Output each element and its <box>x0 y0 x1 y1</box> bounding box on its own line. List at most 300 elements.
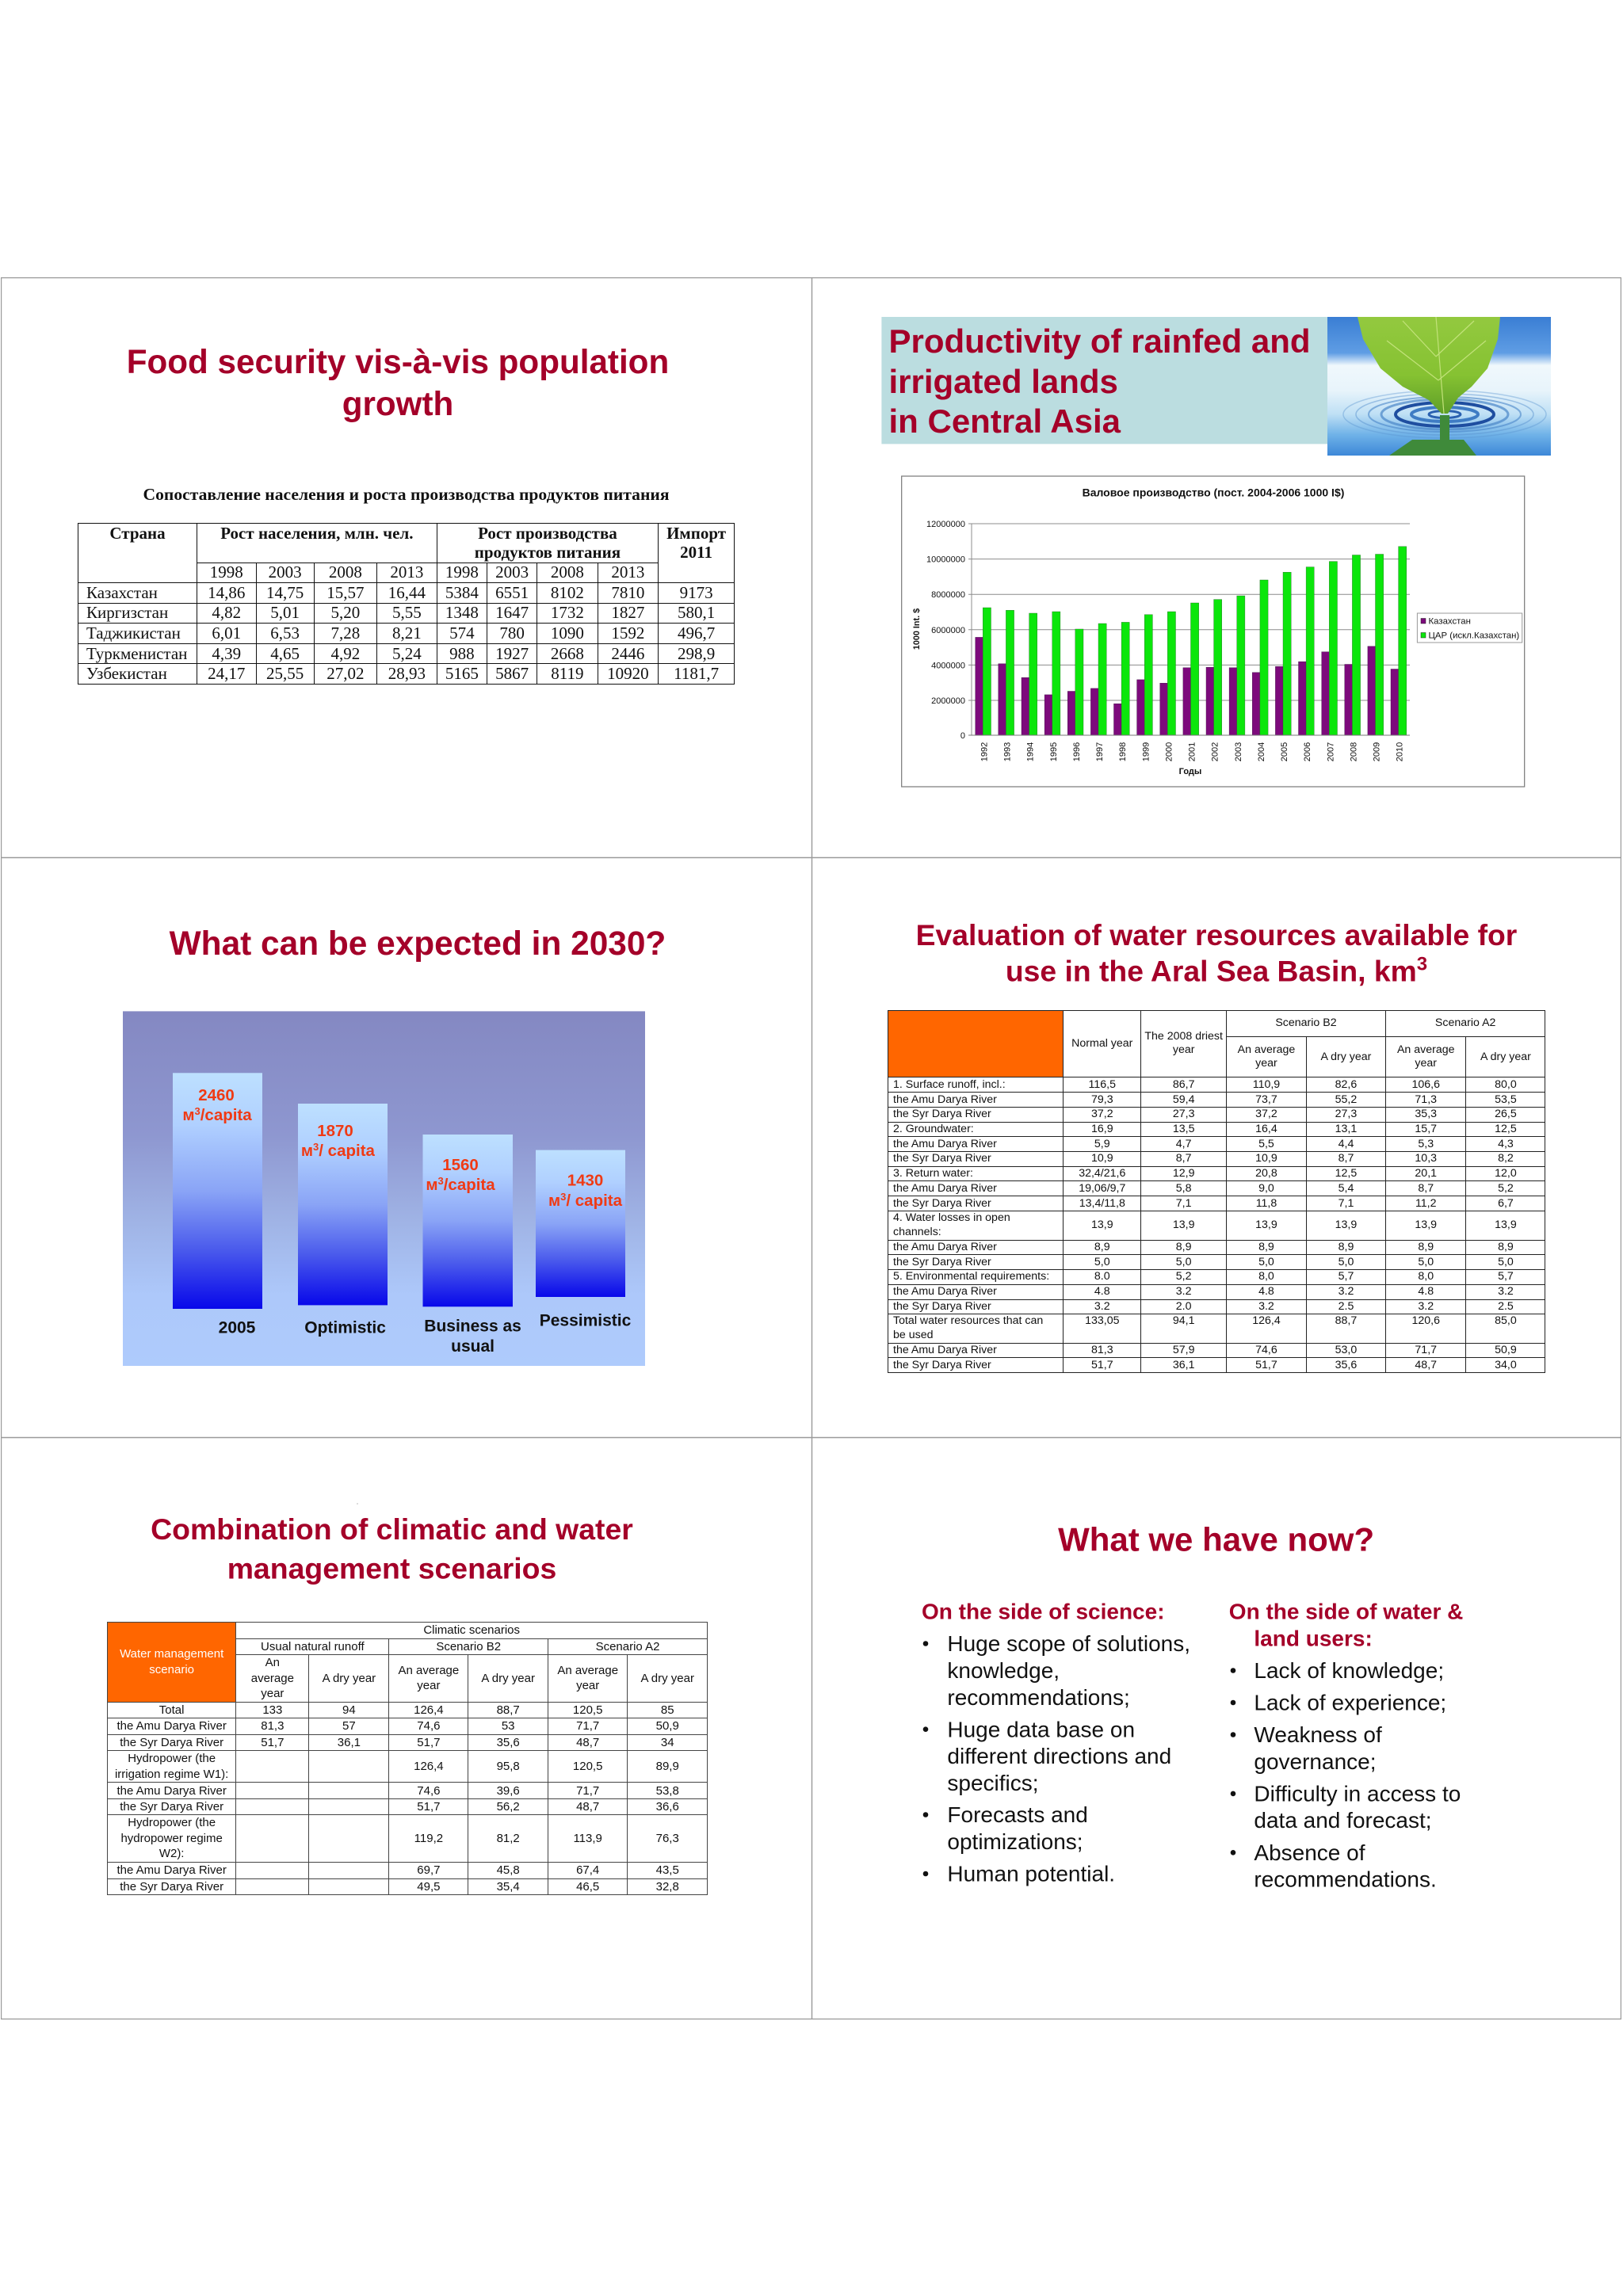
table: climatic and water management scenarios: 45,8 <box>497 1863 520 1877</box>
table: water resources by scenario: 4,4 <box>1338 1138 1354 1150</box>
table: water resources by scenario: 5,5 <box>1258 1138 1274 1150</box>
bar: 2005: 3 <box>194 1105 200 1117</box>
table: water resources by scenario: the Amu Darya River <box>893 1138 997 1150</box>
table: population and food production growth: 14,75 <box>266 583 304 602</box>
table: population and food production growth: 15,57 <box>327 583 364 602</box>
table: water resources by scenario: 1. Surface runoff, incl.: <box>893 1078 1006 1091</box>
table: population and food production growth: 5384 <box>445 583 479 602</box>
table: water resources by scenario: the Amu Darya River <box>893 1344 997 1356</box>
table: water resources by scenario: 11,2 <box>1415 1196 1437 1209</box>
table: population and food production growth: Страна <box>109 524 166 543</box>
title: What we have now? <box>1058 1521 1374 1558</box>
table: climatic and water management scenarios: Water management <box>120 1647 223 1661</box>
table: climatic and water management scenarios: the Amu Darya River <box>116 1863 227 1877</box>
table: water resources by scenario: 11,8 <box>1256 1196 1277 1209</box>
table: climatic and water management scenarios: A dry year <box>323 1672 376 1685</box>
table: water resources by scenario: 80,0 <box>1495 1078 1517 1091</box>
table: water resources by scenario: Total water resources that can <box>893 1314 1043 1327</box>
slide artwork: 2030 water availability chart <box>123 925 666 1366</box>
table: water resources by scenario: 82,6 <box>1335 1078 1357 1091</box>
table: climatic and water management scenarios: 85 <box>661 1703 674 1717</box>
table: population and food production growth: 7810 <box>611 583 644 602</box>
bar: optimistic: 3 <box>313 1141 319 1153</box>
table: climatic and water management scenarios: 53,8 <box>656 1784 679 1798</box>
table: climatic and water management scenarios: year <box>417 1679 440 1692</box>
table: water resources by scenario: 8,0 <box>1418 1270 1434 1283</box>
table: water resources by scenario: 8,7 <box>1176 1152 1192 1165</box>
table: climatic and water management scenarios: 119,2 <box>414 1832 443 1845</box>
table: population and food production growth: 5,01 <box>270 603 300 622</box>
table: population and food production growth: Рост производства <box>478 524 617 543</box>
table: climatic and water management scenarios: A dry year <box>481 1672 535 1685</box>
table: climatic and water management scenarios: 71,7 <box>576 1719 599 1733</box>
table: water resources by scenario: 86,7 <box>1173 1078 1194 1091</box>
table: water resources by scenario: 13,9 <box>1495 1219 1517 1231</box>
table: population and food production growth: Киргизстан <box>86 603 168 622</box>
table: water resources by scenario: An average <box>1397 1043 1455 1056</box>
table: population and food production growth: 8102 <box>551 583 584 602</box>
table: population and food production growth: 5,55 <box>392 603 422 622</box>
table: water resources by scenario: 8,9 <box>1338 1241 1354 1253</box>
bar: pessimistic: 3 <box>560 1191 566 1203</box>
table: climatic and water management scenarios: Hydropower (the <box>128 1752 216 1765</box>
table: water resources by scenario: year <box>1173 1043 1194 1056</box>
table: climatic and water management scenarios: 53 <box>502 1719 515 1733</box>
title: evaluation of water resources: Evaluation of water resources available for <box>916 918 1517 952</box>
table: population and food production growth: 6,01 <box>212 624 241 643</box>
column: on the side of science: Huge scope of solutions, <box>947 1631 1190 1656</box>
table: water resources by scenario: 94,1 <box>1173 1314 1194 1327</box>
table: climatic and water management scenarios: scenario <box>149 1663 194 1676</box>
y axis labels: 10000000 <box>926 555 965 565</box>
x axis year labels: 1996 <box>1072 742 1082 761</box>
table: water resources by scenario: 9,0 <box>1258 1182 1274 1195</box>
chart legend <box>1417 613 1522 643</box>
table: water resources by scenario: 10,9 <box>1255 1152 1277 1165</box>
table: climatic and water management scenarios: 94 <box>342 1703 356 1717</box>
bar: pessimistic: м <box>548 1192 560 1210</box>
y axis labels: 6000000 <box>931 626 965 635</box>
column: on the side of water and land users: recommendations. <box>1254 1867 1437 1892</box>
chart legend: Казахстан <box>1428 616 1471 626</box>
bar: optimistic: / capita <box>319 1142 376 1160</box>
table: population and food production growth: 14,86 <box>208 583 245 602</box>
scenario labels <box>219 1312 632 1356</box>
table: water resources by scenario: the Syr Darya River <box>893 1152 991 1165</box>
table: water resources by scenario: 4.8 <box>1258 1285 1274 1298</box>
table: population and food production growth: 580,1 <box>678 603 715 622</box>
title: combination of climatic and water management scenarios <box>151 1504 633 1585</box>
table: climatic and water management scenarios: the Syr Darya River <box>120 1880 223 1894</box>
table: climatic and water management scenarios: 36,6 <box>656 1800 679 1814</box>
table: water resources by scenario: the Syr Darya River <box>893 1256 991 1268</box>
table: water resources by scenario: 5,7 <box>1338 1270 1354 1283</box>
x axis year labels: 2006 <box>1303 742 1312 761</box>
table: climatic and water management scenarios: Climatic scenarios <box>423 1623 520 1637</box>
y axis labels: 0 <box>960 731 965 741</box>
table: population and food production growth: 298,9 <box>678 644 715 663</box>
banner title: Productivity of rainfed and <box>889 322 1311 360</box>
table: water resources by scenario: 12,5 <box>1335 1167 1357 1180</box>
column: on the side of science: On the side of science: <box>922 1600 1165 1624</box>
table: population and food production growth: 2003 <box>495 563 529 582</box>
y axis labels: 8000000 <box>931 590 965 600</box>
column: on the side of water and land users: Difficulty in access to <box>1254 1781 1461 1806</box>
table: water resources by scenario: 48,7 <box>1415 1359 1437 1371</box>
bar: pessimistic: 1430 <box>567 1171 603 1190</box>
table: population and food production growth: 5,24 <box>392 644 422 663</box>
table: population and food production growth: 1827 <box>611 603 644 622</box>
table: population and food production growth: 1998 <box>445 563 479 582</box>
table: population and food production growth: 1998 <box>210 563 243 582</box>
table: population and food production growth: 27,02 <box>327 664 364 683</box>
table: water resources by scenario: 20,1 <box>1415 1167 1437 1180</box>
scenario labels: Optimistic <box>304 1318 386 1337</box>
table: water resources by scenario: 35,6 <box>1335 1359 1357 1371</box>
table: population and food production growth: 4,39 <box>212 644 241 663</box>
table: water resources by scenario: 27,3 <box>1173 1108 1194 1120</box>
table: water resources by scenario: Scenario A2 <box>1435 1016 1495 1029</box>
table: population and food production growth: 28,93 <box>388 664 426 683</box>
series: Kazakhstan bars <box>976 637 1399 735</box>
bar: 2005: м <box>182 1106 194 1124</box>
table: climatic and water management scenarios: 76,3 <box>656 1832 679 1845</box>
table: water resources by scenario: A dry year <box>1321 1051 1371 1063</box>
table: water resources by scenario: 8,0 <box>1258 1270 1274 1283</box>
bar: optimistic: 1870 <box>317 1122 353 1140</box>
table: water resources by scenario: 53,0 <box>1335 1344 1357 1356</box>
table: population and food production growth <box>78 523 735 685</box>
table: climatic and water management scenarios: 120,5 <box>573 1760 602 1773</box>
table: water resources by scenario: the Amu Darya River <box>893 1093 997 1106</box>
title: food security vis-a-vis population growth: growth <box>342 385 453 422</box>
column: on the side of science: knowledge, <box>947 1658 1060 1683</box>
table: water resources by scenario: 6,7 <box>1498 1196 1514 1209</box>
table: population and food production growth: 2003 <box>269 563 302 582</box>
table: water resources by scenario: 8,9 <box>1094 1241 1110 1253</box>
table: water resources by scenario: 71,7 <box>1415 1344 1437 1356</box>
table: climatic and water management scenarios: 126,4 <box>414 1703 444 1717</box>
table: water resources by scenario: 7,1 <box>1176 1196 1192 1209</box>
table: water resources by scenario: 8,9 <box>1418 1241 1434 1253</box>
table: water resources by scenario: 5,9 <box>1094 1138 1110 1150</box>
table: climatic and water management scenarios: 46,5 <box>576 1880 599 1894</box>
bar: optimistic: м <box>301 1142 313 1160</box>
column: on the side of science: recommendations; <box>947 1685 1130 1710</box>
bar: pessimistic: / capita <box>566 1192 623 1210</box>
x axis year labels: 2009 <box>1373 742 1382 761</box>
table: water resources by scenario: 36,1 <box>1173 1359 1194 1371</box>
table: climatic and water management scenarios: 34 <box>661 1736 674 1749</box>
table: population and food production growth: 4,92 <box>330 644 360 663</box>
column: on the side of science: Huge data base on <box>947 1717 1135 1741</box>
table: water resources by scenario: 7,1 <box>1338 1196 1354 1209</box>
x axis year labels: 1998 <box>1118 742 1128 761</box>
y axis labels: 12000000 <box>926 520 965 529</box>
table: climatic and water management scenarios: 113,9 <box>573 1832 602 1845</box>
table: water resources by scenario: 5,0 <box>1094 1256 1110 1268</box>
table: climatic and water management scenarios: 57 <box>342 1719 356 1733</box>
table: water resources by scenario: 5,2 <box>1498 1182 1514 1195</box>
column: on the side of water and land users: Absence of <box>1254 1840 1365 1865</box>
table: water resources by scenario: 13,4/11,8 <box>1079 1196 1125 1209</box>
table: water resources by scenario: 120,6 <box>1411 1314 1440 1327</box>
table: water resources by scenario: the Amu Darya River <box>893 1285 997 1298</box>
table: climatic and water management scenarios: W2): <box>159 1847 184 1860</box>
table: population and food production growth: 5,20 <box>330 603 360 622</box>
table: population and food production growth: 988 <box>449 644 475 663</box>
scenario labels: 2005 <box>219 1318 256 1337</box>
bar: business as usual <box>423 1135 513 1306</box>
panel: combination of scenarios slide <box>1 1437 812 2019</box>
table: water resources by scenario: 116,5 <box>1089 1078 1116 1091</box>
table: water resources by scenario: The 2008 driest <box>1144 1030 1223 1043</box>
y axis labels <box>926 520 965 741</box>
table: water resources by scenario: 4.8 <box>1418 1285 1434 1298</box>
table: water resources by scenario: 10,3 <box>1415 1152 1437 1165</box>
bar: pessimistic <box>536 1150 625 1297</box>
table: water resources by scenario: 3.2 <box>1338 1285 1354 1298</box>
table: water resources by scenario: 37,2 <box>1091 1108 1113 1120</box>
y axis labels: 4000000 <box>931 661 965 670</box>
table: population and food production growth: 5165 <box>445 664 479 683</box>
title: What can be expected in 2030? <box>170 925 666 962</box>
table: climatic and water management scenarios: 48,7 <box>576 1736 599 1749</box>
table: water resources by scenario: 5,0 <box>1176 1256 1192 1268</box>
table: water resources by scenario: 13,5 <box>1173 1123 1194 1135</box>
table: climatic and water management scenarios: Hydropower (the <box>128 1816 216 1829</box>
table: water resources by scenario: 8.0 <box>1094 1270 1110 1283</box>
x axis year labels: 2004 <box>1257 742 1266 761</box>
table: climatic and water management scenarios: year <box>576 1679 599 1692</box>
bar: optimistic <box>298 1104 388 1305</box>
table: climatic and water management scenarios: 88,7 <box>497 1703 520 1717</box>
table: population and food production growth: 4,82 <box>212 603 241 622</box>
table: population and food production growth: 2011 <box>680 543 712 562</box>
table: climatic and water management scenarios: An average <box>399 1664 459 1677</box>
panel: productivity slide <box>812 277 1621 858</box>
x axis year labels: 2007 <box>1326 742 1335 761</box>
table: water resources by scenario: 15,7 <box>1415 1123 1437 1135</box>
title: food security vis-a-vis population growth <box>127 343 670 504</box>
table: climatic and water management scenarios: 81,2 <box>497 1832 520 1845</box>
table: climatic and water management scenarios: 67,4 <box>576 1863 599 1877</box>
title: evaluation of water resources: use in the Aral Sea Basin, km <box>1006 955 1417 988</box>
table: water resources by scenario: 3.2 <box>1176 1285 1192 1298</box>
table: water resources by scenario: 5. Environmental requirements: <box>893 1270 1049 1283</box>
x axis year labels: 2000 <box>1164 742 1174 761</box>
scenario labels: usual <box>451 1337 495 1356</box>
table: water resources by scenario: 2.5 <box>1498 1300 1514 1313</box>
bar: 2005: 2460 <box>198 1086 235 1104</box>
table: water resources by scenario: 53,5 <box>1495 1093 1517 1106</box>
table: water resources by scenario: 16,9 <box>1091 1123 1113 1135</box>
table: climatic and water management scenarios: 133 <box>262 1703 282 1717</box>
table: water resources by scenario: the Syr Darya River <box>893 1108 991 1120</box>
table: water resources by scenario: 3.2 <box>1498 1285 1514 1298</box>
table: water resources by scenario: 10,9 <box>1091 1152 1113 1165</box>
table: water resources by scenario: 3. Return water: <box>893 1167 973 1180</box>
table: population and food production growth: 25,55 <box>266 664 304 683</box>
table: climatic and water management scenarios: Total <box>159 1703 184 1717</box>
table: water resources by scenario: 26,5 <box>1495 1108 1517 1120</box>
table: water resources by scenario: 16,4 <box>1255 1123 1277 1135</box>
title: combination of climatic and water management scenarios: management scenarios <box>227 1552 556 1585</box>
table: population and food production growth: 8119 <box>551 664 584 683</box>
series: Central Asia excl. Kazakhstan bars <box>983 547 1407 735</box>
table: water resources by scenario: 4.8 <box>1094 1285 1110 1298</box>
table: population and food production growth: 1927 <box>495 644 529 663</box>
icon: leaf over water photo <box>1327 317 1551 456</box>
table: population and food production growth: 2008 <box>329 563 362 582</box>
bar: business as usual: 3 <box>437 1175 444 1187</box>
table: water resources by scenario: year <box>1415 1057 1437 1070</box>
table: climatic and water management scenarios: 74,6 <box>417 1784 440 1798</box>
slide text: title and two bullet columns <box>922 1521 1463 1892</box>
x axis year labels: 2008 <box>1349 742 1358 761</box>
table: water resources by scenario: 3.2 <box>1094 1300 1110 1313</box>
table: water resources by scenario: 50,9 <box>1495 1344 1517 1356</box>
x axis year labels: 1994 <box>1026 742 1036 761</box>
table: population and food production growth: 5867 <box>495 664 529 683</box>
table: climatic and water management scenarios: the Syr Darya River <box>120 1800 223 1814</box>
table: water resources by scenario: 8,7 <box>1418 1182 1434 1195</box>
table: water resources by scenario: 8,9 <box>1498 1241 1514 1253</box>
table: population and food production growth: Таджикистан <box>86 624 181 643</box>
table: climatic and water management scenarios: 35,6 <box>497 1736 520 1749</box>
bar: business as usual: /capita <box>444 1176 495 1194</box>
table: water resources by scenario: 5,2 <box>1176 1270 1192 1283</box>
table: climatic and water management scenarios: 48,7 <box>576 1800 599 1814</box>
title: combination of climatic and water management scenarios: Combination of climatic and water <box>151 1512 633 1546</box>
column: on the side of water and land users: On the side of water & <box>1229 1600 1463 1624</box>
table: population and food production growth: 780 <box>499 624 525 643</box>
table: climatic and water management scenarios: 32,8 <box>656 1880 679 1894</box>
column: on the side of water and land users: Weakness of <box>1254 1722 1382 1747</box>
chart background <box>123 1011 645 1366</box>
table: water resources by scenario: 13,9 <box>1335 1219 1357 1231</box>
table: climatic and water management scenarios: 126,4 <box>414 1760 444 1773</box>
bar: business as usual: м <box>426 1176 437 1194</box>
table: climatic and water management scenarios: 43,5 <box>656 1863 679 1877</box>
table: climatic and water management scenarios: 69,7 <box>417 1863 440 1877</box>
table: water resources by scenario: 106,6 <box>1411 1078 1440 1091</box>
table: water resources by scenario: 55,2 <box>1335 1093 1357 1106</box>
x axis year labels: 2003 <box>1234 742 1243 761</box>
table: climatic and water management scenarios: Usual natural runoff <box>261 1640 365 1653</box>
table: population and food production growth: Казахстан <box>86 583 158 602</box>
table: water resources by scenario: the Syr Darya River <box>893 1300 991 1313</box>
table: climatic and water management scenarios: the Amu Darya River <box>116 1719 227 1733</box>
table: water resources by scenario: be used <box>893 1329 934 1341</box>
table: climatic and water management scenarios: Scenario A2 <box>596 1640 659 1653</box>
table: water resources by scenario: 2.0 <box>1176 1300 1192 1313</box>
table: water resources by scenario: 79,3 <box>1091 1093 1113 1106</box>
table: climatic and water management scenarios: 49,5 <box>417 1880 440 1894</box>
table: water resources by scenario: 13,9 <box>1255 1219 1277 1231</box>
table: water resources by scenario: the Syr Darya River <box>893 1196 991 1209</box>
table: water resources by scenario: 88,7 <box>1335 1314 1357 1327</box>
table: water resources by scenario: 5,0 <box>1338 1256 1354 1268</box>
table: population and food production growth: Туркменистан <box>86 644 187 663</box>
column: on the side of water and land users: governance; <box>1254 1749 1377 1774</box>
table: climatic and water management scenarios: the Syr Darya River <box>120 1736 223 1749</box>
table: population and food production growth: 4,65 <box>270 644 300 663</box>
title: food security vis-a-vis population growth: Food security vis-à-vis population <box>127 343 669 380</box>
x axis year labels: 1992 <box>980 742 989 761</box>
table: population and food production growth: 2013 <box>390 563 423 582</box>
panel: expectations for 2030 slide <box>1 857 812 1438</box>
banner background <box>881 317 1327 444</box>
table: population and food production growth: 1592 <box>611 624 644 643</box>
slide artwork: banner, photo and chart <box>881 317 1551 788</box>
table: water resources by scenario: 5,0 <box>1418 1256 1434 1268</box>
title: evaluation of water resources <box>916 918 1517 988</box>
table: water resources by scenario: 71,3 <box>1415 1093 1437 1106</box>
table: water resources by scenario: 3.2 <box>1258 1300 1274 1313</box>
table: water resources by scenario: 12,5 <box>1495 1123 1517 1135</box>
table: water resources by scenario: channels: <box>893 1226 941 1238</box>
table: population and food production growth: 2668 <box>551 644 584 663</box>
bar: 2005 <box>173 1073 262 1309</box>
table: population and food production growth: 16,44 <box>388 583 426 602</box>
table: climatic and water management scenarios: An average <box>557 1664 618 1677</box>
table: climatic and water management scenarios: 74,6 <box>417 1719 440 1733</box>
banner title <box>889 322 1311 440</box>
table: water resources by scenario: 57,9 <box>1173 1344 1194 1356</box>
x axis year labels: 1993 <box>1003 742 1013 761</box>
x axis year labels: 2001 <box>1188 742 1197 761</box>
table: water resources by scenario: 126,4 <box>1252 1314 1281 1327</box>
table: climatic and water management scenarios: A dry year <box>640 1672 694 1685</box>
x axis year labels: 2005 <box>1280 742 1289 761</box>
table: climatic and water management scenarios: 95,8 <box>497 1760 520 1773</box>
table: water resources by scenario: 74,6 <box>1255 1344 1277 1356</box>
column: on the side of science: different directions and <box>947 1744 1171 1768</box>
table: climatic and water management scenarios: 81,3 <box>261 1719 284 1733</box>
table: population and food production growth: 1348 <box>445 603 479 622</box>
table: water resources by scenario: 8,9 <box>1176 1241 1192 1253</box>
table: water resources by scenario: 13,9 <box>1415 1219 1437 1231</box>
table: water resources by scenario: 4,3 <box>1498 1138 1514 1150</box>
table: population and food production growth: 9173 <box>680 583 713 602</box>
table: water resources by scenario: 3.2 <box>1418 1300 1434 1313</box>
table: water resources by scenario: 5,7 <box>1498 1270 1514 1283</box>
table: water resources by scenario: 4,7 <box>1176 1138 1192 1150</box>
column: on the side of water and land users: data and forecast; <box>1254 1808 1432 1833</box>
table: population and food production growth: 496,7 <box>678 624 715 643</box>
table: population and food production growth: 2446 <box>611 644 644 663</box>
x axis year labels: 1999 <box>1141 742 1151 761</box>
x axis year labels: 2010 <box>1396 742 1405 761</box>
table: climatic and water management scenarios: 89,9 <box>656 1760 679 1773</box>
chart title: Валовое производство (пост. 2004-2006 1000 I$) <box>1083 486 1344 499</box>
table: population and food production growth: 1090 <box>551 624 584 643</box>
table: water resources by scenario: 19,06/9,7 <box>1079 1182 1125 1195</box>
table: water resources by scenario: 81,3 <box>1091 1344 1113 1356</box>
table: water resources by scenario: 133,05 <box>1085 1314 1119 1327</box>
table: water resources by scenario: 12,0 <box>1495 1167 1517 1180</box>
x axis year labels: 2002 <box>1211 742 1220 761</box>
table: population and food production growth: 574 <box>449 624 475 643</box>
column: on the side of science <box>922 1600 1190 1886</box>
y axis title: 1000 Int. $ <box>912 608 922 650</box>
column: on the side of water and land users: Lack of knowledge; <box>1254 1658 1444 1683</box>
banner title: in Central Asia <box>889 402 1121 440</box>
table: population and food production growth: 1732 <box>551 603 584 622</box>
table: water resources by scenario: 5,8 <box>1176 1182 1192 1195</box>
table: water resources by scenario: 85,0 <box>1495 1314 1517 1327</box>
